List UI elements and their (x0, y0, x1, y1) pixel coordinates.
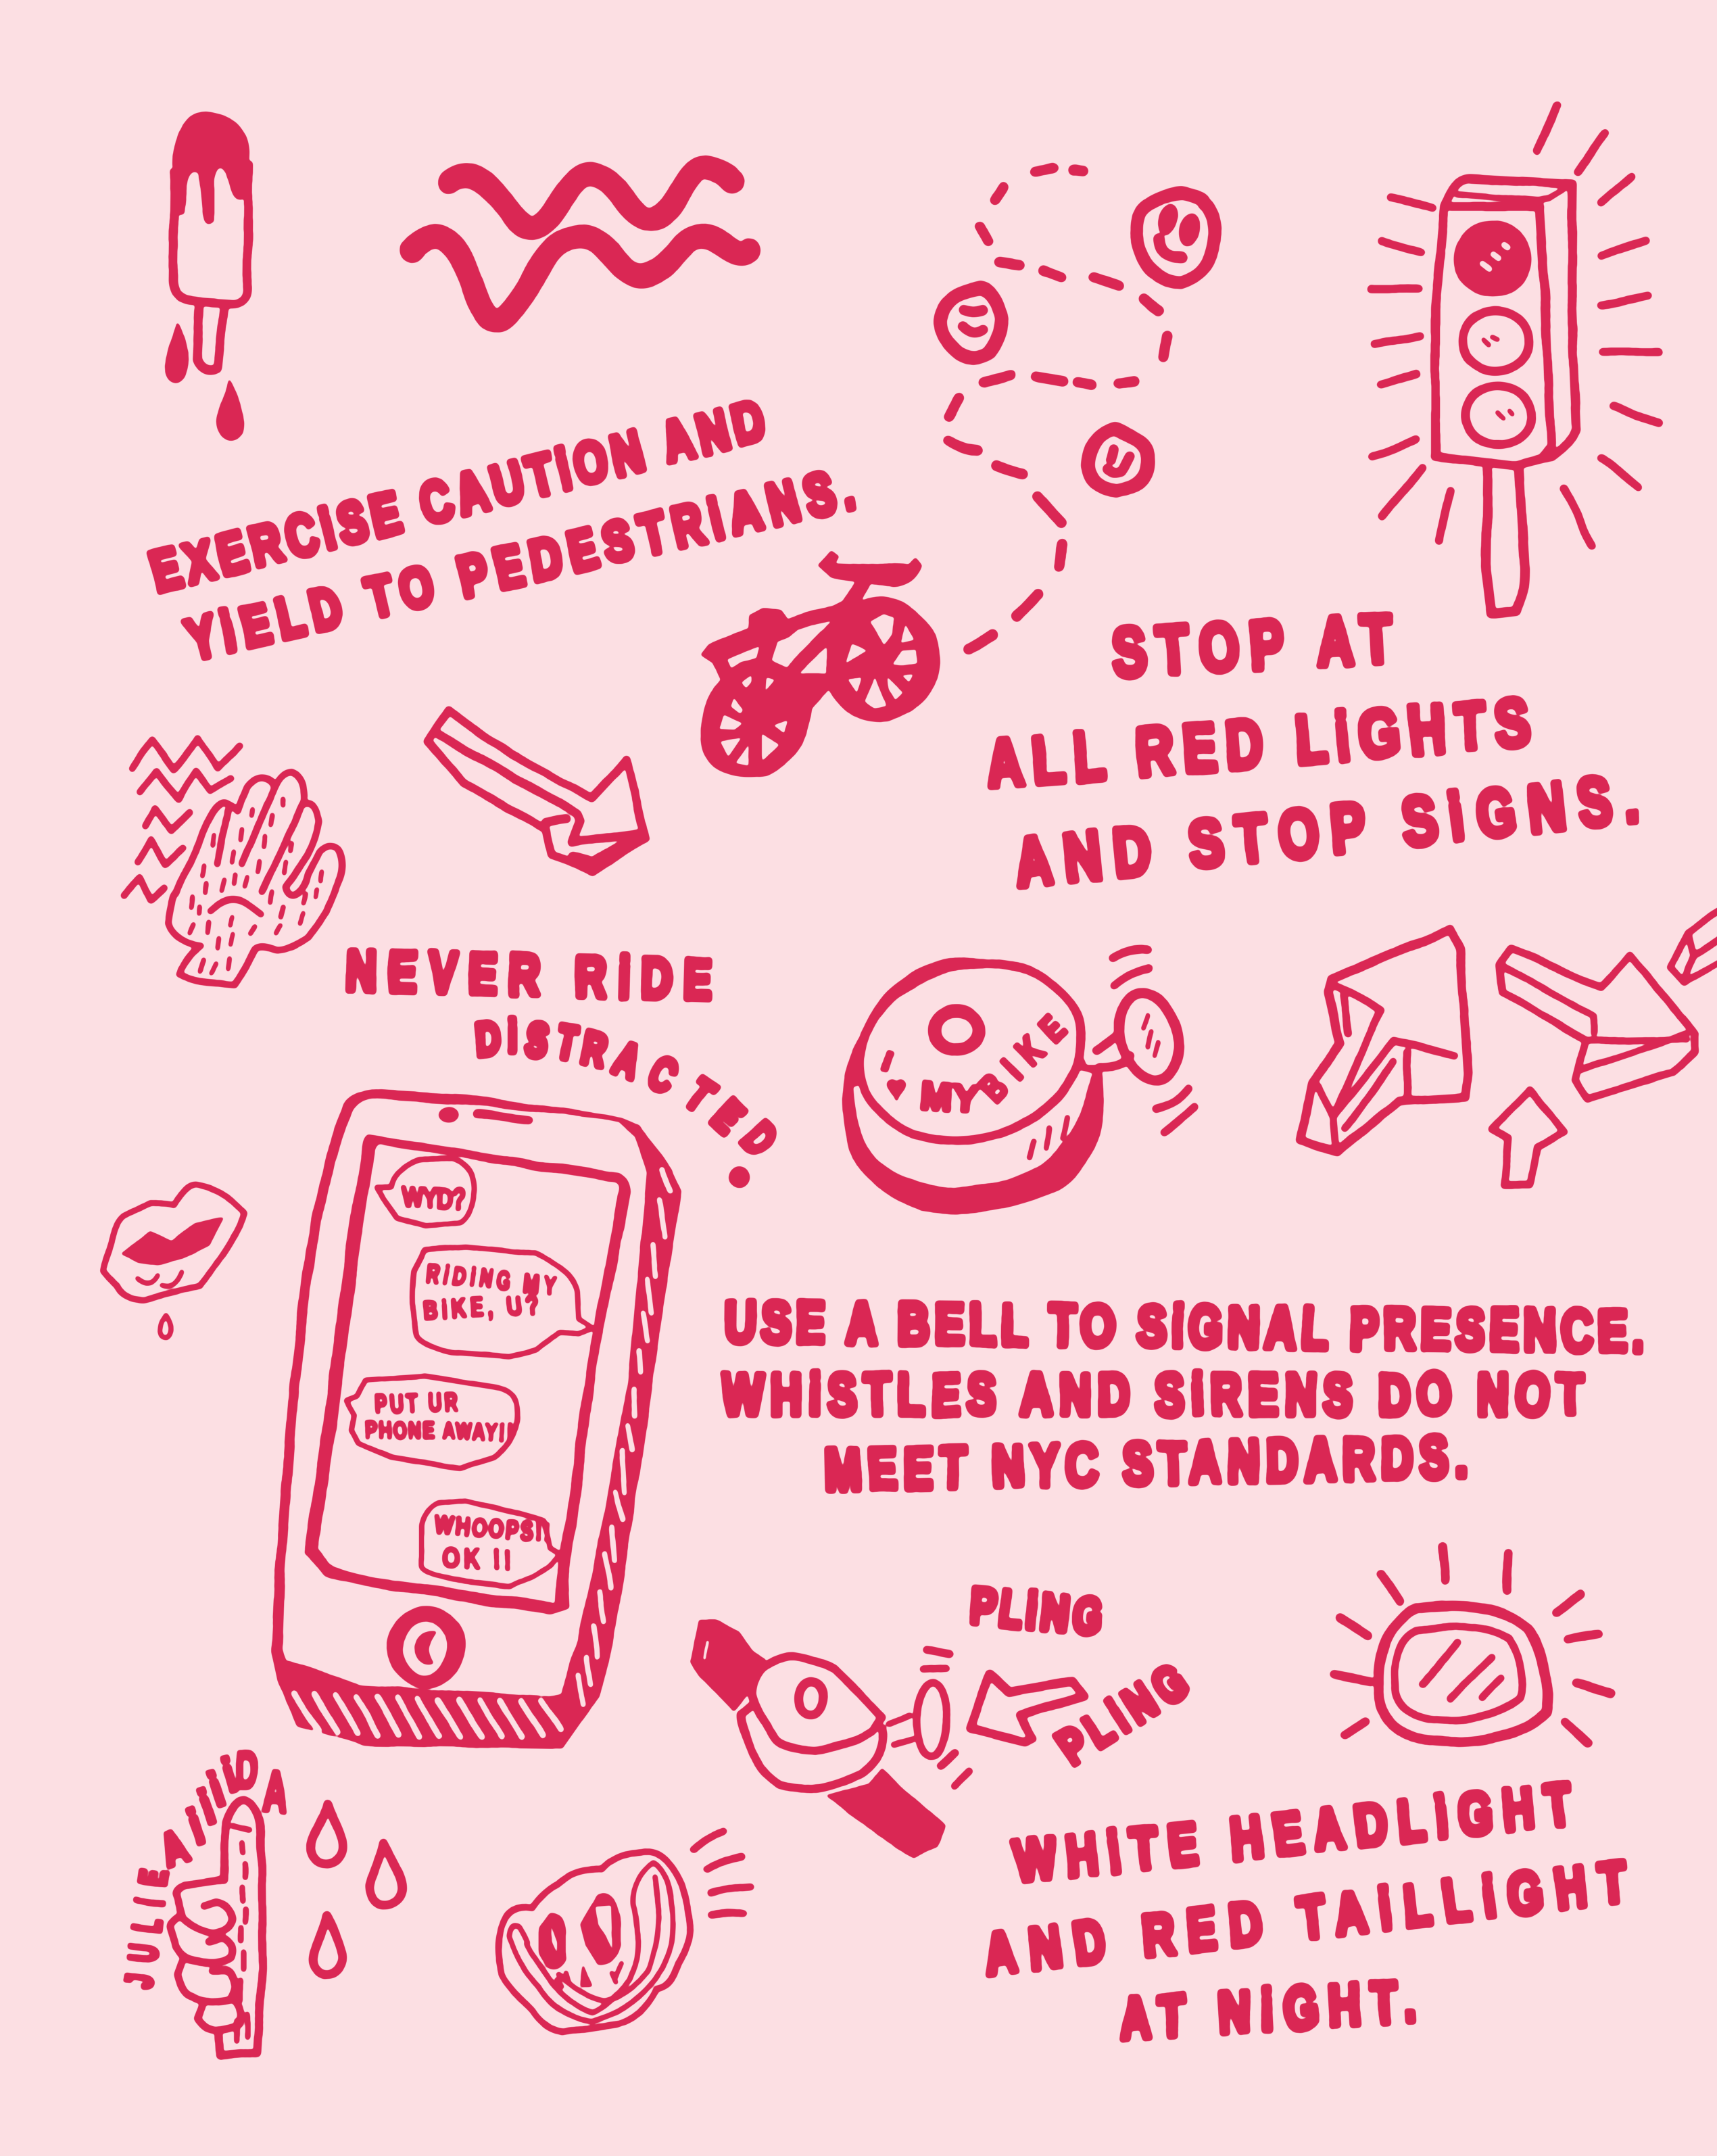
heading: never ride distracted: T (552, 1014, 582, 1070)
heading: never ride distracted: T (675, 1068, 725, 1122)
heading: never ride distracted: D (732, 1111, 788, 1165)
icon: hand pointing finger (170, 1800, 262, 2055)
icon: sad hand with zigzags (125, 738, 342, 986)
heading: never ride distracted: C (640, 1046, 686, 1104)
icon: glowing headlight (1334, 1547, 1611, 1744)
heading: stop at all red lights: STOP AT (1111, 601, 1395, 692)
heading: exercise caution: EXERCiSE CAUTiON AND (144, 387, 771, 604)
icon: smiley face lower (1088, 429, 1148, 492)
home button (387, 1607, 464, 1687)
heading: never ride distracted: E (702, 1089, 754, 1143)
heading: never ride distracted: R (577, 1020, 612, 1077)
bubble: riding my bike (412, 1247, 592, 1356)
heading: never ride distracted: S (523, 1012, 550, 1067)
signature: julie: i (181, 1799, 210, 1855)
signature: julie: A (262, 1759, 289, 1825)
signature: julie: i (202, 1762, 231, 1818)
bell lettering: BIKE (971, 1006, 1074, 1110)
side hatching (579, 1170, 671, 1705)
bubble: whoops ok: OK !! (443, 1541, 512, 1576)
bubble: whoops ok (422, 1500, 561, 1587)
bell lettering: I (879, 1046, 896, 1078)
icon: handlebar bell (692, 1621, 969, 1858)
dashed route (948, 168, 1167, 649)
icons: water drops (311, 1804, 403, 1975)
bell lettering: MY (919, 1074, 980, 1121)
heading: never ride distracted: i (507, 1009, 516, 1062)
bubble: put ur phone away: PHONE AWAY!! (364, 1416, 513, 1446)
heading: stop at all red lights: ALL RED LiGHTS (984, 684, 1532, 803)
bubble: put ur phone away: PUT UR (374, 1388, 458, 1420)
icon: smiley face left (941, 288, 1002, 358)
heading: never ride distracted: A (607, 1031, 648, 1089)
icon: melting popsicle (166, 113, 249, 440)
text: use a bell: USE A BELL TO SiGNAL PRESENCE. (725, 1289, 1645, 1364)
text: use a bell: WHiSTLES AND SiRENS DO NOT (722, 1362, 1584, 1428)
label: pling: PLiNG (968, 1577, 1105, 1646)
text: headlight and taillight (981, 1771, 1630, 2052)
heading: never ride distracted: D (473, 1011, 502, 1066)
heading: exercise caution: YiELD TO PEDESTRiANS. (180, 456, 861, 672)
icon: bicycle (701, 550, 940, 777)
heading: stop at all red lights (984, 601, 1643, 902)
heading: stop at all red lights: AND STOP SiGNS. (1011, 761, 1643, 902)
bubble: riding my bike: RiDiNG MY (424, 1259, 557, 1301)
heading: never ride distracted: NEVER RiDE (345, 938, 713, 1012)
bubble: put ur phone away (346, 1376, 517, 1468)
icon: traffic light (1371, 106, 1660, 615)
signature: julie: i (216, 1746, 243, 1803)
signature: julie: i (193, 1779, 221, 1836)
phone body (272, 1091, 681, 1748)
icon: bell with I love my bike (840, 939, 1194, 1213)
bell lettering (879, 1006, 1074, 1121)
icon: arrow pointing down right (427, 711, 645, 871)
speaker and camera (441, 1107, 458, 1121)
screen (305, 1136, 629, 1614)
icon: arrow pointing right (1500, 949, 1695, 1099)
icon: wavy squiggles (412, 168, 749, 320)
signature: julie: A (153, 1819, 195, 1877)
bubble: riding my bike: BiKE, U? (422, 1289, 539, 1326)
text: headlight and taillight: AND RED TAiLLiGHT (981, 1849, 1630, 1988)
bottom hatching (294, 1694, 561, 1737)
text: use a bell: MEET NYC STANDARDS. (824, 1424, 1468, 1504)
bubble: wyd (377, 1159, 475, 1226)
text: headlight and taillight: WHiTE HEADLiGHT (1011, 1771, 1575, 1895)
bubble: whoops ok: WHOOPS!! (434, 1510, 551, 1548)
heading: never ride distracted (345, 938, 788, 1187)
icon: corner arrow (1670, 907, 1717, 983)
text: headlight and taillight: AT NiGHT. (1117, 1968, 1418, 2052)
icon: large arrow up (1301, 930, 1468, 1152)
label: pling rotated: PLiNG (1047, 1653, 1198, 1777)
signature: julie: JULiE (118, 1867, 176, 1991)
icon: retro cartoon face (498, 1831, 750, 2032)
signature: julie: D (237, 1741, 258, 1799)
signature: julie (118, 1741, 289, 1991)
icon: smartphone with chat (272, 1091, 681, 1748)
bubble: wyd: WYD? (401, 1180, 466, 1216)
bell lettering: ♥ (887, 1071, 906, 1107)
icon: lips (103, 1185, 245, 1338)
icon: small arrow up (1491, 1091, 1564, 1185)
icon: smiley face top (1136, 193, 1215, 283)
traffic light rays (1371, 106, 1660, 546)
text: use a bell (722, 1289, 1645, 1504)
icon: arrow to bell (971, 1675, 1083, 1742)
